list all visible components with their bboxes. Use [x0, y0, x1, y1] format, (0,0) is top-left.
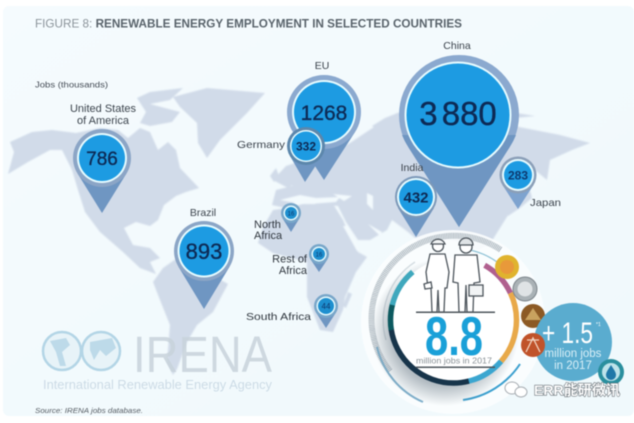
upper left thin arc: [383, 262, 415, 340]
pin: South Africa: [314, 294, 338, 328]
upper right thin arc: [470, 250, 497, 262]
logo tagline: International Renewable Energy Agency: [43, 377, 272, 392]
watermark text: ERR能研微讯: [534, 382, 620, 398]
caption: million jobs in 2017: million jobs in 2017: [416, 356, 492, 366]
label: United States of America: United States: [70, 103, 137, 115]
lower right blue arc: [463, 364, 520, 400]
hatched outer arc: [371, 236, 501, 371]
logo wordmark: IRENA: [133, 326, 272, 383]
source note: Source: IRENA jobs database.: [35, 406, 143, 415]
label: South Africa: South Africa: [246, 311, 311, 323]
pin: India: 432: [403, 190, 429, 206]
landmass: Japan and Korea: [493, 190, 532, 216]
pin: Brazil: [174, 221, 234, 309]
landmass: British Isles: [270, 168, 279, 182]
label: Rest of Africa: Africa: [279, 265, 308, 277]
landmass: North America: [8, 128, 199, 274]
label: Germany: Germany: [237, 139, 286, 151]
landmass: Scandinavia: [273, 162, 310, 188]
icon: hydropower: [598, 359, 624, 385]
landmass: Madagascar: [343, 292, 352, 308]
label: United States of America: of America: [77, 115, 130, 127]
pin: India: [395, 176, 437, 237]
world map: [8, 88, 590, 375]
pin: South Africa: 44: [322, 302, 331, 311]
pin: Germany: 332: [296, 140, 316, 154]
axis note: jobs unit: Jobs (thousands): [35, 80, 108, 90]
icon: wind: [513, 277, 537, 301]
pin: Japan: [500, 156, 536, 209]
label: North Africa: North: [254, 219, 281, 231]
label: India: India: [401, 162, 424, 174]
pin: Rest of Africa: [309, 244, 329, 272]
landmass: Greenland: [173, 88, 265, 158]
landmass: Canadian arctic islands: [137, 88, 183, 126]
coloured ring: [390, 257, 516, 383]
callout: plus 1.5 million jobs: million jobs: [545, 348, 602, 360]
pin: EU: [287, 75, 361, 180]
divider above figure: [416, 312, 495, 313]
landmass: South America: [153, 256, 228, 375]
figure: 8.8: 8.8: [425, 305, 483, 367]
pin: Japan: 283: [508, 168, 528, 182]
pin: China: 3 880: [419, 95, 497, 132]
pin: United States: [73, 129, 131, 213]
icon: bioenergy: [521, 304, 545, 328]
pin: Brazil: 893: [186, 239, 222, 264]
landmass: Africa: [258, 204, 367, 332]
pin: China: [399, 55, 519, 227]
graphic backdrop: [361, 230, 545, 414]
pin: Rest of Africa: 16: [316, 252, 323, 258]
divider below figure: [416, 366, 495, 368]
panel: jobs total graphic: [361, 230, 624, 414]
logo: IRENA: [43, 326, 272, 392]
white disc: [392, 258, 516, 382]
icon: female worker: [424, 239, 449, 312]
callout: plus 1.5 million jobs: [534, 303, 612, 381]
pin: Germany: [287, 127, 325, 182]
watermark icon: [505, 382, 527, 397]
logo icon: infinity globes: [43, 332, 120, 370]
icon: solar: [495, 255, 519, 279]
label: EU: EU: [315, 60, 329, 72]
landmass: Eurasia: [272, 113, 590, 250]
disc shadow: [371, 258, 519, 406]
pin: North Africa: [281, 203, 301, 232]
label: Rest of Africa: Rest of: [272, 254, 308, 266]
callout: plus 1.5 million jobs: + 1.5: [542, 317, 593, 350]
title: FIGURE 8: RENEWABLE ENERGY EMPLOYMENT IN SELECTED COUNTRIES: [35, 16, 462, 30]
icon: male worker: [453, 238, 483, 312]
inner thin arc: [377, 347, 423, 402]
label: Brazil: Brazil: [190, 207, 216, 219]
pin: United States: 786: [86, 149, 118, 170]
pin: North Africa: 16: [288, 212, 295, 218]
callout: plus 1.5 million jobs: in 2017: [554, 360, 592, 372]
icon: geothermal construction: [521, 333, 545, 357]
pin: EU: 1268: [301, 102, 347, 125]
label: Japan: Japan: [530, 197, 561, 209]
landmass: Arctic islands of Russia: [372, 112, 535, 130]
label: China: China: [443, 40, 471, 52]
callout: plus 1.5 million jobs: *1: [596, 322, 601, 328]
seas: Mediterranean, Black, Caspian and Red Sea: [280, 193, 382, 251]
watermark: wechat account: [505, 382, 620, 398]
label: North Africa: Africa: [254, 230, 283, 242]
